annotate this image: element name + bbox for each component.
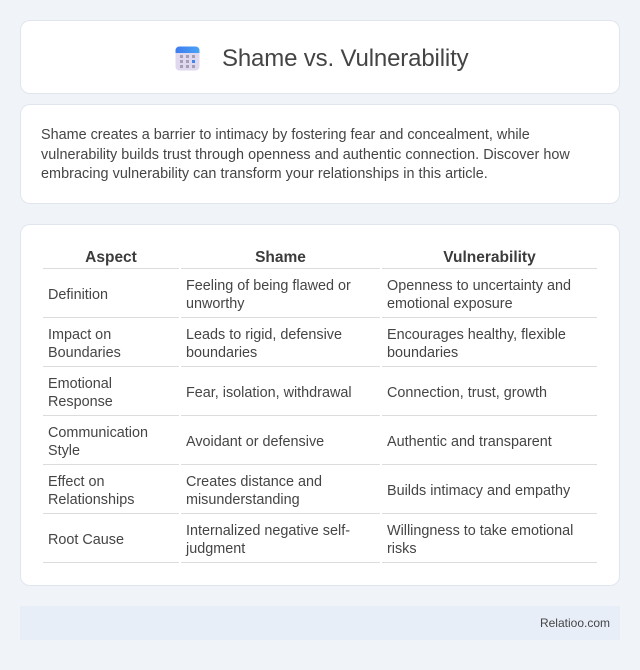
row: Effect on Relationships bbox=[48, 474, 570, 508]
row: Effect on Relationships: Effect on bbox=[48, 474, 105, 490]
row: Definition bbox=[48, 278, 571, 312]
row: Effect on Relationships: Relationships bbox=[48, 492, 134, 508]
intro text: embracing vulnerability can transform your relationships in this article. bbox=[41, 166, 488, 182]
footer bbox=[20, 606, 620, 640]
row: Communication Style: Avoidant or defensive bbox=[186, 434, 324, 450]
row: Communication Style: Communication bbox=[48, 425, 148, 441]
row: Emotional Response: Fear, isolation, withdrawal bbox=[186, 385, 352, 401]
row: Emotional Response: Emotional bbox=[48, 376, 112, 392]
intro card bbox=[20, 104, 620, 204]
row: Impact on Boundaries: Boundaries bbox=[48, 345, 121, 361]
row: Emotional Response: Response bbox=[48, 394, 113, 410]
row: Impact on Boundaries: boundaries bbox=[186, 345, 257, 361]
row: Impact on Boundaries bbox=[48, 327, 566, 361]
column heading: Aspect: Aspect bbox=[85, 249, 137, 266]
row: Communication Style bbox=[48, 425, 552, 459]
row: Effect on Relationships: misunderstanding bbox=[186, 492, 300, 508]
row: Root Cause: Willingness to take emotional bbox=[387, 523, 573, 539]
row: Root Cause: Root Cause bbox=[48, 532, 124, 548]
column heading: Vulnerability: Vulnerability bbox=[443, 249, 536, 266]
row: Definition: unworthy bbox=[186, 296, 244, 312]
title: Shame vs. Vulnerability bbox=[222, 45, 468, 72]
row: Impact on Boundaries: Encourages healthy, flexible bbox=[387, 327, 566, 343]
intro text bbox=[41, 127, 570, 182]
row: Root Cause: Internalized negative self- bbox=[186, 523, 350, 539]
row: Communication Style: Style bbox=[48, 443, 80, 459]
row: Definition: Openness to uncertainty and bbox=[387, 278, 571, 294]
row: Impact on Boundaries: boundaries bbox=[387, 345, 458, 361]
column heading: Shame: Shame bbox=[255, 249, 306, 266]
intro text: vulnerability builds trust through openness and authentic connection. Discover how bbox=[41, 146, 570, 162]
header card bbox=[20, 20, 620, 94]
intro text: Shame creates a barrier to intimacy by fostering fear and concealment, while bbox=[41, 127, 530, 143]
row: Root Cause bbox=[48, 523, 573, 557]
row: Definition: Feeling of being flawed or bbox=[186, 278, 351, 294]
icon: calendar bbox=[176, 46, 200, 70]
table card bbox=[20, 224, 620, 586]
row: Impact on Boundaries: Leads to rigid, defensive bbox=[186, 327, 342, 343]
row: Emotional Response: Connection, trust, growth bbox=[387, 385, 547, 401]
row: Effect on Relationships: Creates distance and bbox=[186, 474, 322, 490]
row: Emotional Response bbox=[48, 376, 547, 410]
footer credit: Relatioo.com bbox=[540, 616, 610, 630]
row: Effect on Relationships: Builds intimacy and empathy bbox=[387, 483, 570, 499]
row: Communication Style: Authentic and transparent bbox=[387, 434, 552, 450]
row: Impact on Boundaries: Impact on bbox=[48, 327, 111, 343]
row: Root Cause: risks bbox=[387, 541, 417, 557]
row: Definition: Definition bbox=[48, 287, 108, 303]
row: Root Cause: judgment bbox=[186, 541, 245, 557]
row: Definition: emotional exposure bbox=[387, 296, 513, 312]
